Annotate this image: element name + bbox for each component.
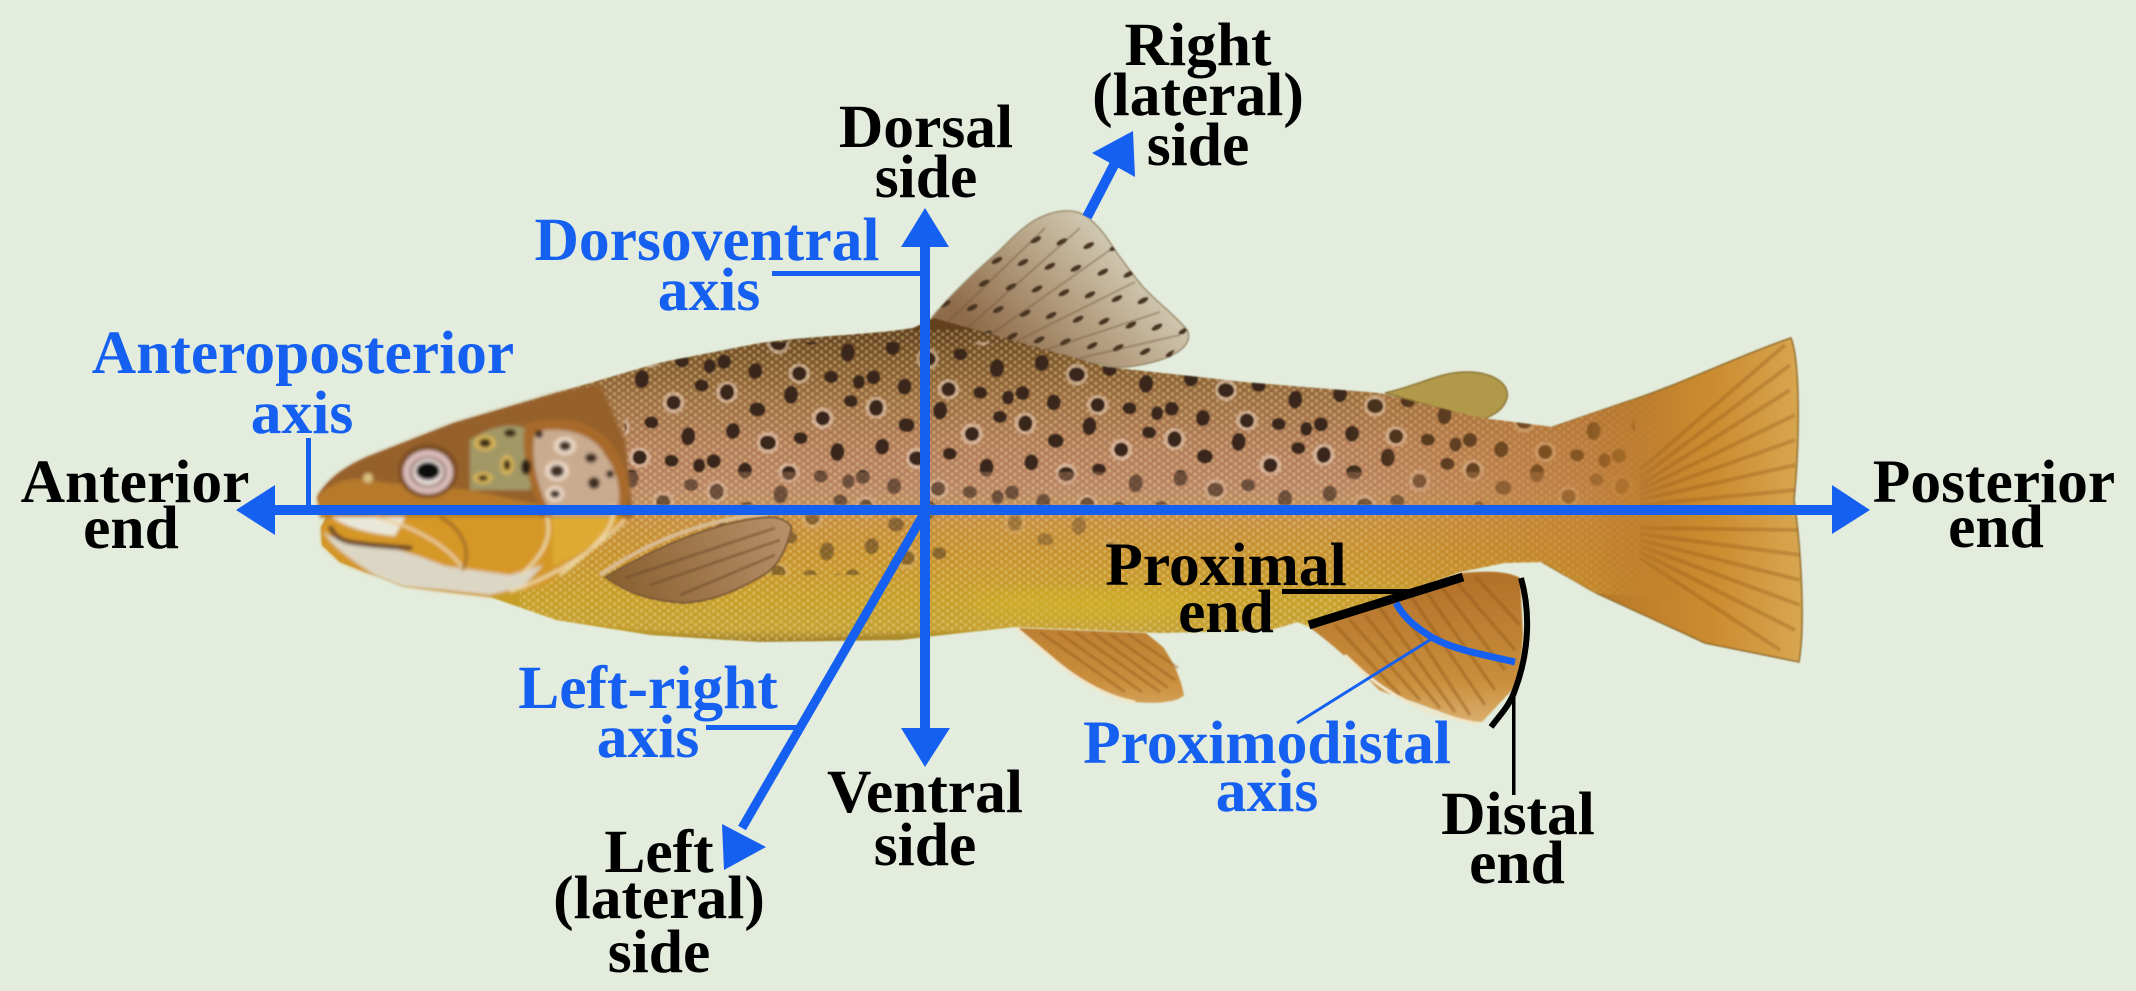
label: proximal end: end [1178, 578, 1274, 646]
label: anteroposterior axis: Anteroposterior [92, 319, 514, 387]
head [317, 384, 632, 597]
label: dorsoventral axis: Dorsoventral [534, 206, 880, 274]
pectoral fin [600, 514, 791, 603]
fish illustration: brown trout [317, 211, 1802, 724]
label: dorsoventral axis: axis [658, 256, 760, 324]
tail fin [1542, 338, 1802, 662]
anal fin [1309, 572, 1523, 724]
axis: dorsoventral arrow [901, 208, 950, 767]
arrow: right side [1087, 131, 1135, 217]
distal end curve [1491, 578, 1527, 727]
label: proximal end: Proximal [1105, 531, 1347, 599]
label: proximodistal axis: Proximodistal [1083, 709, 1451, 777]
label: left lateral side: Left [604, 818, 714, 886]
leader: left-right [706, 725, 798, 730]
label: right lateral side: side [1147, 111, 1249, 179]
axis: left-right arrow [722, 510, 926, 870]
label: right lateral side: Right [1125, 11, 1272, 79]
label: proximodistal axis: axis [1216, 757, 1318, 825]
label: ventral side: side [874, 811, 976, 879]
label: distal end: end [1469, 829, 1565, 897]
gill cover [524, 419, 629, 518]
leader: proximal [1282, 589, 1410, 594]
label: distal end: Distal [1441, 780, 1595, 848]
label: anterior end: Anterior [21, 448, 249, 516]
fish scales [520, 330, 1690, 650]
dorsal fin [930, 211, 1189, 367]
fish body [317, 318, 1690, 650]
leader: dorsoventral [772, 271, 922, 276]
label: dorsal side: side [875, 143, 977, 211]
label: right lateral side: (lateral) [1092, 61, 1304, 129]
label: left lateral side: side [608, 918, 710, 986]
gill cover spots [535, 430, 614, 502]
label: left lateral side: (lateral) [553, 864, 765, 932]
fish spots [625, 342, 1635, 575]
proximodistal axis curve [1396, 603, 1515, 662]
leader: distal [1512, 690, 1516, 795]
label: left-right axis: Left-right [518, 654, 778, 722]
label: ventral side: Ventral [827, 758, 1023, 826]
leader: anteroposterior [306, 438, 311, 506]
eye [398, 444, 458, 498]
leader: proximodistal [1297, 638, 1433, 723]
label: dorsal side: Dorsal [839, 93, 1013, 161]
orange wash towards tail [1357, 392, 1668, 598]
ventral fin [1016, 628, 1184, 703]
label: left-right axis: axis [597, 703, 699, 771]
adipose fin [1385, 372, 1507, 420]
label: posterior end: Posterior [1873, 448, 2115, 516]
label: anteroposterior axis: axis [251, 379, 353, 447]
axis: anteroposterior arrow [236, 485, 1870, 535]
proximal end line [1309, 577, 1463, 625]
yellow belly highlight [970, 591, 1210, 619]
head spots [363, 429, 531, 484]
lower cheek and jaw [321, 517, 625, 597]
label: posterior end: end [1948, 493, 2044, 561]
label: anterior end: end [83, 494, 179, 562]
